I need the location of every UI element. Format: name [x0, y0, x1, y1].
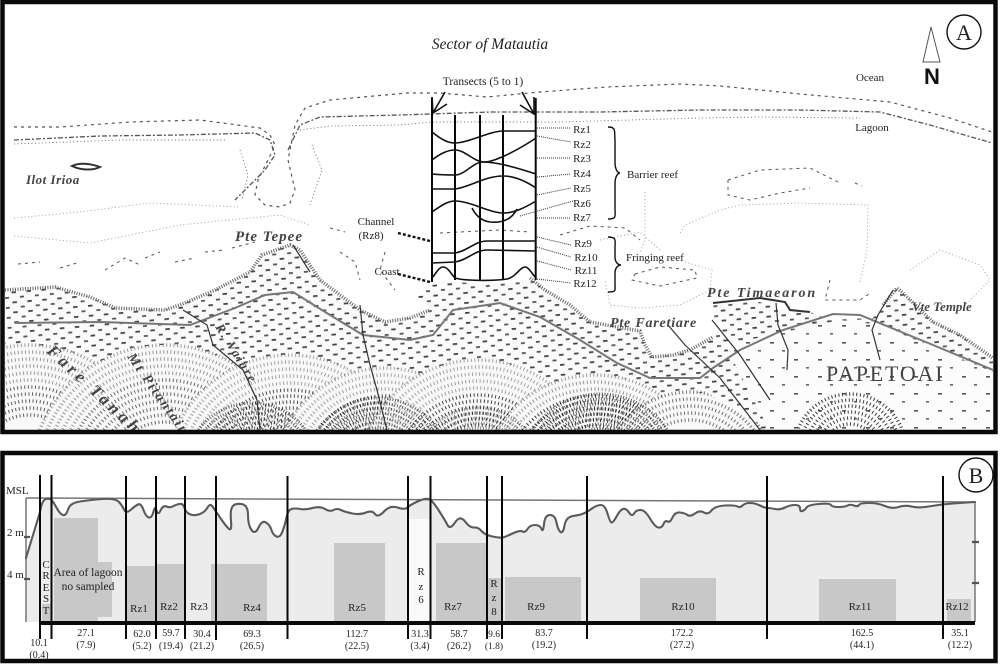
callout: channel — [358, 216, 430, 242]
unsampled zone Rz6 — [408, 519, 430, 622]
zone labels: R — [417, 566, 425, 578]
zone labels: Rz7 — [444, 601, 462, 613]
place names: Vte Temple — [912, 299, 972, 314]
seabed baseline — [40, 621, 975, 625]
zone widths and percentages: (1.8) — [485, 641, 503, 652]
place names: Fare Tanah — [43, 340, 146, 439]
zone labels: T — [43, 605, 50, 617]
zone widths and percentages — [29, 628, 972, 661]
zone widths and percentages: (26.5) — [240, 641, 264, 652]
zone widths and percentages: (26.2) — [447, 641, 471, 652]
zone labels: R — [42, 570, 50, 582]
zone widths and percentages: 58.7 — [450, 629, 468, 640]
place names: Pte Faretiare — [610, 316, 697, 331]
zone labels: Area of lagoon — [54, 567, 123, 579]
brace: fringing reef: Fringing reef — [626, 252, 684, 264]
frame of panel A — [2, 2, 996, 432]
zone widths and percentages: 27.1 — [77, 628, 95, 639]
zone labels: 6 — [418, 594, 424, 606]
zone labels: E — [43, 582, 50, 594]
zone labels: z — [492, 592, 497, 604]
sampled area bars — [42, 518, 971, 621]
seabed profile fill — [26, 498, 975, 622]
panel badge A — [947, 15, 981, 49]
hillside hachures — [5, 343, 764, 430]
reef zone labels with leaders: Rz9 — [574, 238, 592, 250]
zone labels: Rz9 — [527, 601, 545, 613]
callout: channel: Channel — [358, 216, 394, 228]
reef zone labels with leaders: Rz7 — [573, 212, 591, 224]
seabed profile line — [26, 499, 975, 558]
zone widths and percentages: 31.3 — [411, 629, 429, 640]
panel badge B: B — [969, 463, 983, 488]
panel badge B — [959, 458, 993, 492]
label: ocean: Ocean — [856, 72, 885, 84]
label: transects: Transects (5 to 1) — [443, 76, 523, 88]
zone widths and percentages: 172.2 — [671, 628, 693, 639]
zone widths and percentages: (27.2) — [670, 640, 694, 651]
zone widths and percentages: 59.7 — [162, 628, 180, 639]
zone widths and percentages: (5.2) — [132, 641, 152, 652]
reef zone labels with leaders: Rz3 — [573, 153, 591, 165]
zone widths and percentages: 69.3 — [243, 629, 261, 640]
reef zone labels with leaders: Rz2 — [573, 139, 591, 151]
zone labels: Rz4 — [243, 602, 261, 614]
north arrow: N — [924, 64, 940, 89]
zone widths and percentages: 30.4 — [193, 629, 211, 640]
zone labels: no sampled — [62, 581, 115, 593]
zone widths and percentages: 112.7 — [346, 629, 368, 640]
transect grid — [432, 92, 536, 282]
rivers — [183, 245, 893, 430]
place names: Pte Tepee — [235, 229, 303, 245]
frame of panel B — [2, 453, 996, 661]
coast stipple — [5, 245, 993, 358]
zone widths and percentages: (3.4) — [410, 641, 430, 652]
brace: barrier reef: Barrier reef — [627, 169, 678, 181]
land area with villages — [5, 245, 993, 431]
mean sea level line and scale: MSL — [6, 485, 29, 497]
panel badge A: A — [956, 20, 972, 45]
reef zone labels with leaders: Rz5 — [573, 183, 591, 195]
coastal road — [15, 292, 993, 378]
zone widths and percentages: 162.5 — [851, 628, 873, 639]
zone labels: z — [419, 581, 424, 593]
zone widths and percentages: 62.0 — [133, 629, 151, 640]
zone widths and percentages: (22.5) — [345, 641, 369, 652]
reef zone labels with leaders: Rz12 — [573, 278, 597, 290]
brace: barrier reef — [608, 127, 678, 219]
zone widths and percentages: (21.2) — [190, 641, 214, 652]
zone labels: Rz3 — [190, 601, 208, 613]
zone widths and percentages: (19.4) — [159, 641, 183, 652]
zone labels: Rz5 — [348, 602, 366, 614]
zone labels: Rz1 — [130, 603, 148, 615]
place names: R. Vaiare — [212, 320, 261, 386]
mean sea level line and scale — [6, 485, 979, 622]
zone labels: R — [490, 578, 498, 590]
panel A: map of the Matautia sector — [0, 0, 998, 435]
place names: PAPETOAI — [826, 361, 944, 386]
zone labels: Rz12 — [945, 601, 969, 613]
zone widths and percentages: (44.1) — [850, 640, 874, 651]
coral reef outlines — [14, 84, 992, 312]
mean sea level line and scale: 4 m — [7, 569, 24, 581]
place names: Pte Timaearon — [707, 286, 817, 301]
north arrow — [923, 27, 940, 89]
reef zone labels with leaders: Rz4 — [573, 168, 591, 180]
label: lagoon: Lagoon — [855, 122, 889, 134]
zone widths and percentages: 35.1 — [951, 628, 969, 639]
zone widths and percentages: 83.7 — [535, 628, 553, 639]
zone widths and percentages: (12.2) — [948, 640, 972, 651]
reef zone labels with leaders — [520, 124, 598, 290]
zone widths and percentages: (19.2) — [532, 640, 556, 651]
reef zone labels with leaders: Rz1 — [573, 124, 591, 136]
brace: fringing reef — [608, 237, 684, 292]
zone widths and percentages: 9.6 — [488, 630, 500, 640]
reef zone labels with leaders: Rz6 — [573, 198, 591, 210]
mean sea level line and scale: 2 m — [7, 527, 24, 539]
zone labels: Rz11 — [849, 601, 871, 613]
zone labels: 8 — [491, 606, 497, 618]
reef zone labels with leaders: Rz11 — [575, 265, 597, 277]
plain of Papetoai — [725, 320, 993, 431]
place names: Ilot Irioa — [25, 172, 80, 187]
zone labels: C — [42, 559, 50, 571]
zone widths and percentages: 10.1 — [30, 638, 48, 649]
callout: channel: (Rz8) — [358, 230, 384, 242]
zone labels: S — [43, 593, 49, 605]
zone labels: Rz2 — [160, 601, 178, 613]
reef zone labels with leaders: Rz10 — [574, 252, 598, 264]
zone boundaries — [40, 475, 943, 640]
callout: coast — [374, 266, 430, 282]
map title: Sector of Matautia — [432, 36, 548, 53]
zone labels — [42, 559, 969, 618]
panel B: depth profile across reef zones — [2, 453, 996, 661]
zone widths and percentages: (0.4) — [29, 650, 49, 661]
zone labels: Rz10 — [671, 601, 695, 613]
place names — [25, 172, 972, 439]
place names: Mt Pitantain — [123, 350, 192, 439]
zone widths and percentages: (7.9) — [76, 640, 96, 651]
callout: coast: Coast — [374, 266, 400, 278]
